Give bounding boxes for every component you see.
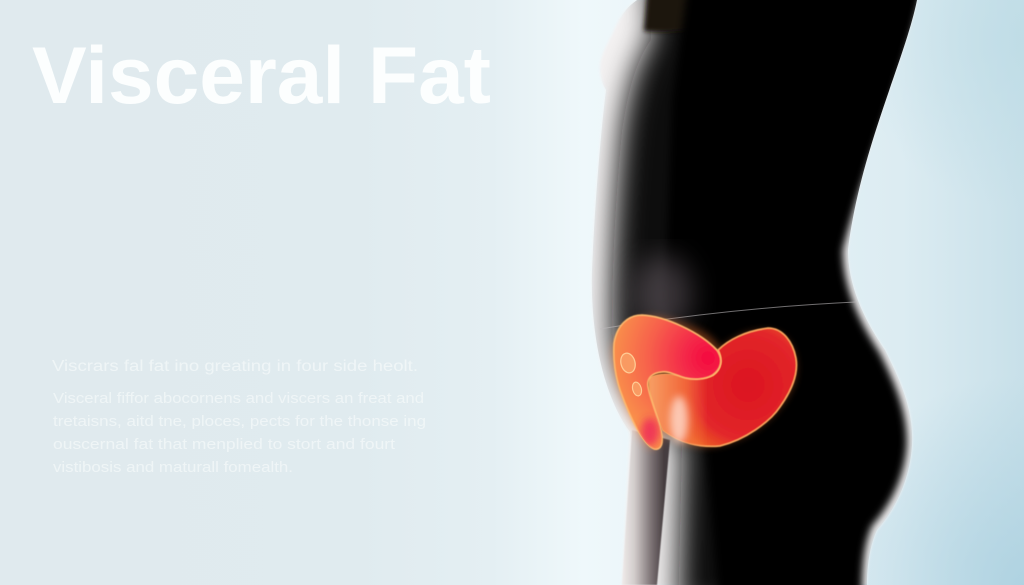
lower lobe xyxy=(650,328,797,446)
left soft shadow xyxy=(592,0,724,585)
title: Visceral Fat xyxy=(32,31,491,121)
main black mass xyxy=(665,0,926,585)
sheen xyxy=(670,396,688,444)
description: vistibosis and maturall fomealth. xyxy=(53,460,293,476)
description: ouscernal fat that menplied to stort and fourt xyxy=(53,437,395,453)
lower abdomen haze xyxy=(632,255,692,335)
fat cell small xyxy=(631,381,643,397)
lobe tip blush xyxy=(641,418,659,446)
human body silhouette xyxy=(592,0,926,585)
shaded body xyxy=(612,0,926,585)
chest shadow xyxy=(640,0,685,35)
upper lobe xyxy=(614,315,721,449)
visceral fat organ xyxy=(612,315,797,449)
organ glow xyxy=(612,317,796,448)
subheading: Viscrars fal fat ino greating in four side heolt. xyxy=(52,358,418,375)
rim light xyxy=(592,0,917,585)
description: tretaisns, aitd tne, ploces, pects for the thonse ing xyxy=(53,414,426,430)
waistband line xyxy=(600,302,856,329)
text block: subheading and description xyxy=(52,358,426,476)
description: Visceral fiffor abocornens and viscers an freat and xyxy=(53,391,424,407)
lower lobe orange wash xyxy=(650,372,722,446)
back leg xyxy=(622,430,670,585)
description xyxy=(53,391,426,476)
fat cell large xyxy=(619,352,637,374)
